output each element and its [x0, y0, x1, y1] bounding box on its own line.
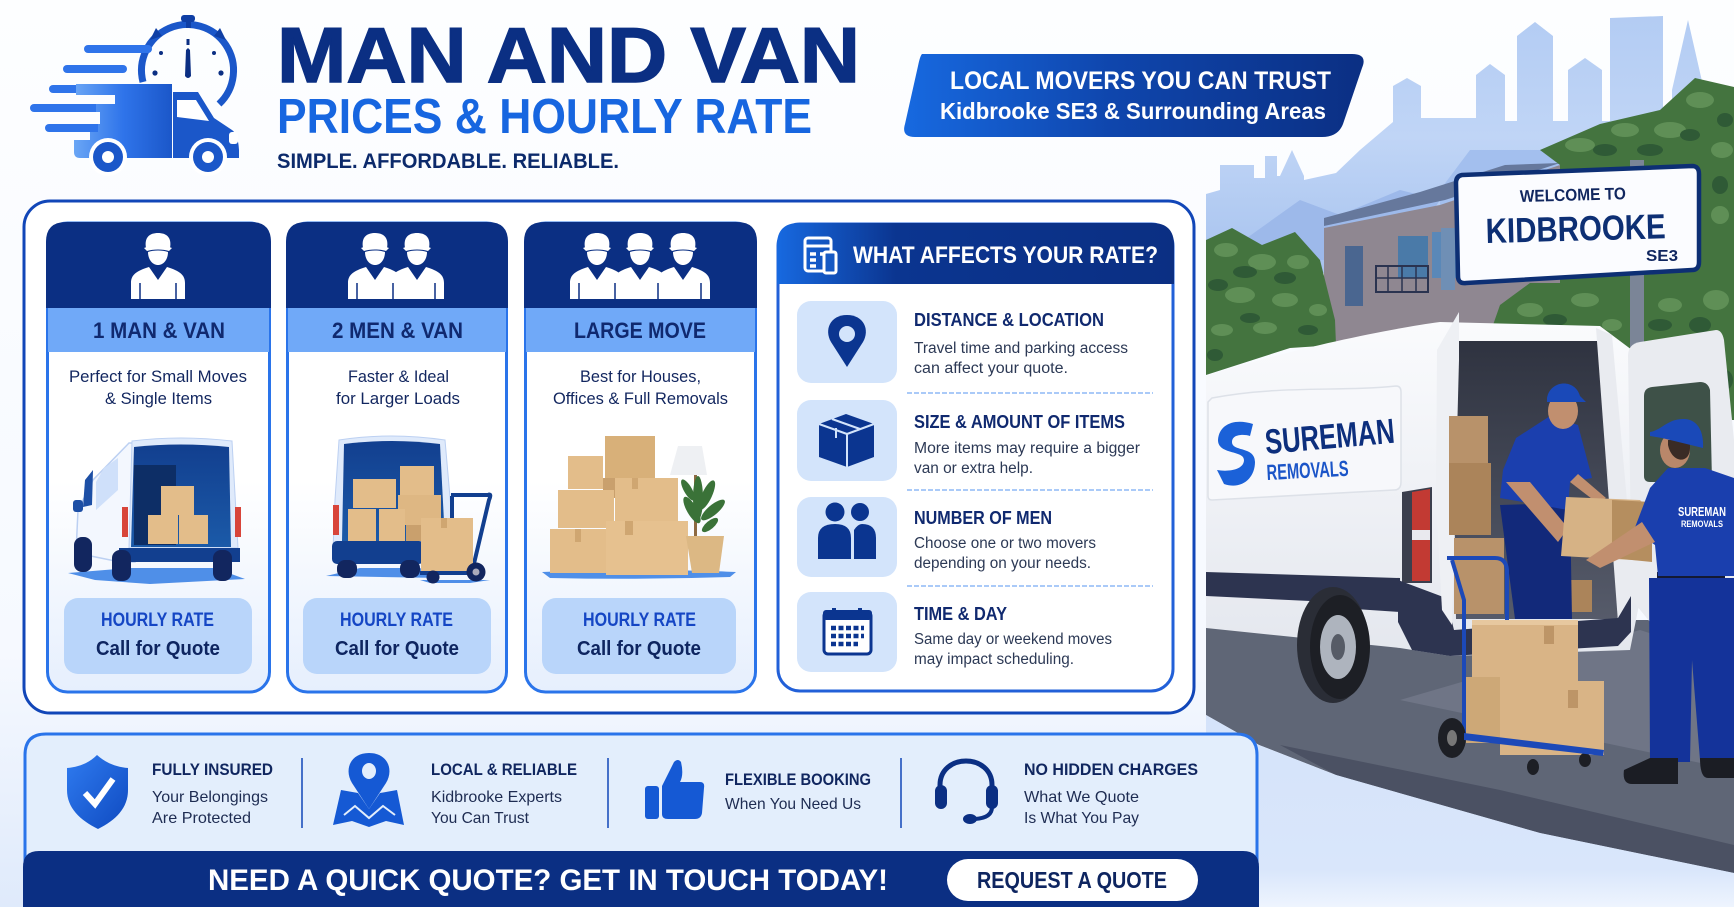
- panel: pricing and rate factors: [24, 201, 1194, 713]
- call to action bar: NEED A QUICK QUOTE? GET IN TOUCH TODAY!: [208, 864, 888, 897]
- benefit: local and reliable: [333, 753, 577, 827]
- title: [277, 11, 860, 173]
- title: MAN AND VAN: [277, 11, 860, 99]
- card: 2 men and van: Faster & Ideal: [348, 367, 449, 386]
- van rear door right frame: [1596, 328, 1623, 618]
- illustration: van with boxes and trolley: [326, 436, 490, 584]
- factor: number of men: [797, 497, 1096, 577]
- factor: distance and location: DISTANCE & LOCATION: [914, 310, 1104, 330]
- benefit: fully insured: Are Protected: [152, 810, 251, 827]
- benefit: no hidden charges: Is What You Pay: [1024, 810, 1139, 827]
- factor: distance and location: can affect your quote.: [914, 360, 1068, 377]
- card: 1 man and van: & Single Items: [105, 389, 212, 408]
- van logo: Sureman Removals: SUREMAN: [1263, 412, 1396, 462]
- factor: size and amount: [797, 400, 1140, 481]
- factor: number of men: Choose one or two movers: [914, 535, 1096, 552]
- icon: two movers: [348, 233, 444, 299]
- panel: what affects your rate: WHAT AFFECTS YOUR RATE?: [853, 242, 1158, 269]
- card: 2 men and van: [286, 222, 508, 692]
- sign post: [1630, 160, 1644, 350]
- sign: Welcome to Kidbrooke SE3: SE3: [1646, 248, 1678, 265]
- benefit: local and reliable: You Can Trust: [431, 810, 530, 827]
- factor: distance and location: Travel time and parking access: [914, 340, 1128, 357]
- benefit: local and reliable: Kidbrooke Experts: [431, 789, 562, 806]
- factor: time and day: TIME & DAY: [914, 604, 1007, 624]
- man in van: [1500, 383, 1606, 619]
- icon: three movers: [570, 233, 710, 299]
- van: [1206, 312, 1734, 703]
- factor: size and amount: SIZE & AMOUNT OF ITEMS: [914, 412, 1125, 432]
- skyline: [1206, 16, 1704, 280]
- building: [1324, 163, 1560, 345]
- trolley with boxes: [1438, 558, 1604, 775]
- title: SIMPLE. AFFORDABLE. RELIABLE.: [277, 150, 619, 173]
- pale wash: [1206, 715, 1734, 907]
- factor: number of men: NUMBER OF MEN: [914, 508, 1052, 528]
- rear opening: [1452, 341, 1618, 619]
- card: large move: Offices & Full Removals: [553, 389, 728, 408]
- banner: local movers: [904, 54, 1364, 137]
- factor: number of men: depending on your needs.: [914, 555, 1091, 572]
- call to action bar: [23, 851, 1259, 907]
- rate box: [64, 598, 252, 674]
- card: 2 men and van: 2 MEN & VAN: [332, 318, 463, 343]
- rate box: [303, 598, 491, 674]
- ground: [1206, 620, 1734, 873]
- van logo: Sureman Removals: REMOVALS: [1266, 456, 1349, 485]
- factor: size and amount: van or extra help.: [914, 460, 1033, 477]
- rate box: [542, 598, 736, 674]
- stacked boxes in van: [1449, 416, 1592, 614]
- title: PRICES & HOURLY RATE: [277, 90, 812, 144]
- factor: size and amount: More items may require a bigger: [914, 440, 1140, 457]
- panel: benefits strip: [25, 734, 1257, 907]
- benefit: flexible booking: When You Need Us: [725, 796, 861, 813]
- benefit: no hidden charges: [935, 761, 1198, 827]
- icon: one mover: [131, 233, 185, 299]
- card: 1 man and van: [46, 222, 271, 692]
- benefit: fully insured: [67, 755, 273, 829]
- factor: time and day: Same day or weekend moves: [914, 631, 1112, 648]
- benefit: flexible booking: [645, 760, 871, 819]
- rate box: Call for Quote: [577, 638, 701, 660]
- banner: local movers: Kidbrooke SE3 & Surrounding Areas: [940, 98, 1326, 124]
- benefit: flexible booking: FLEXIBLE BOOKING: [725, 771, 871, 789]
- door leaf left: [1436, 312, 1459, 625]
- van logo: Sureman Removals: [1217, 412, 1396, 486]
- rate box: HOURLY RATE: [340, 610, 453, 631]
- trees right: [1486, 78, 1734, 420]
- trees left: [1206, 228, 1336, 375]
- card: large move: [524, 222, 757, 692]
- benefit: no hidden charges: NO HIDDEN CHARGES: [1024, 761, 1198, 779]
- carried box: [1561, 497, 1652, 562]
- sign: Welcome to Kidbrooke SE3: WELCOME TO: [1520, 184, 1626, 206]
- benefit: no hidden charges: What We Quote: [1024, 789, 1139, 806]
- rate box: HOURLY RATE: [101, 610, 214, 631]
- banner: local movers: LOCAL MOVERS YOU CAN TRUST: [950, 67, 1331, 95]
- illustration: boxes, lamp and plant: [542, 436, 736, 579]
- man with back to camera: [1586, 419, 1734, 784]
- benefit: fully insured: Your Belongings: [152, 789, 268, 806]
- card: 1 man and van: Perfect for Small Moves: [69, 367, 247, 386]
- button: request a quote: [947, 859, 1198, 901]
- door leaf right: [1628, 330, 1734, 622]
- button: request a quote: REQUEST A QUOTE: [977, 867, 1167, 893]
- card: large move: Best for Houses,: [580, 367, 701, 386]
- benefit: local and reliable: LOCAL & RELIABLE: [431, 761, 577, 779]
- tail light: [1402, 487, 1432, 583]
- rate box: Call for Quote: [335, 638, 459, 660]
- factor: distance and location: [797, 301, 1128, 383]
- panel: what affects your rate: [777, 223, 1174, 691]
- illustration: Kidbrooke street scene with van and movers: [1206, 16, 1734, 907]
- factor: time and day: [797, 592, 1112, 672]
- icon: calculator: [805, 238, 836, 273]
- sign: Welcome to Kidbrooke SE3: [1456, 166, 1699, 283]
- rate box: Call for Quote: [96, 638, 220, 660]
- benefit: fully insured: FULLY INSURED: [152, 761, 273, 779]
- card: 1 man and van: 1 MAN & VAN: [93, 318, 225, 343]
- factor: time and day: may impact scheduling.: [914, 651, 1074, 668]
- rate box: HOURLY RATE: [583, 610, 696, 631]
- man with back to camera: REMOVALS: [1681, 519, 1723, 530]
- sign: Welcome to Kidbrooke SE3: KIDBROOKE: [1485, 207, 1666, 251]
- card: 2 men and van: for Larger Loads: [336, 389, 460, 408]
- header icon: speeding van with stopwatch: [30, 15, 239, 176]
- card: large move: LARGE MOVE: [574, 318, 706, 343]
- illustration: van with boxes: [68, 438, 245, 584]
- rear bumper: [1398, 580, 1631, 656]
